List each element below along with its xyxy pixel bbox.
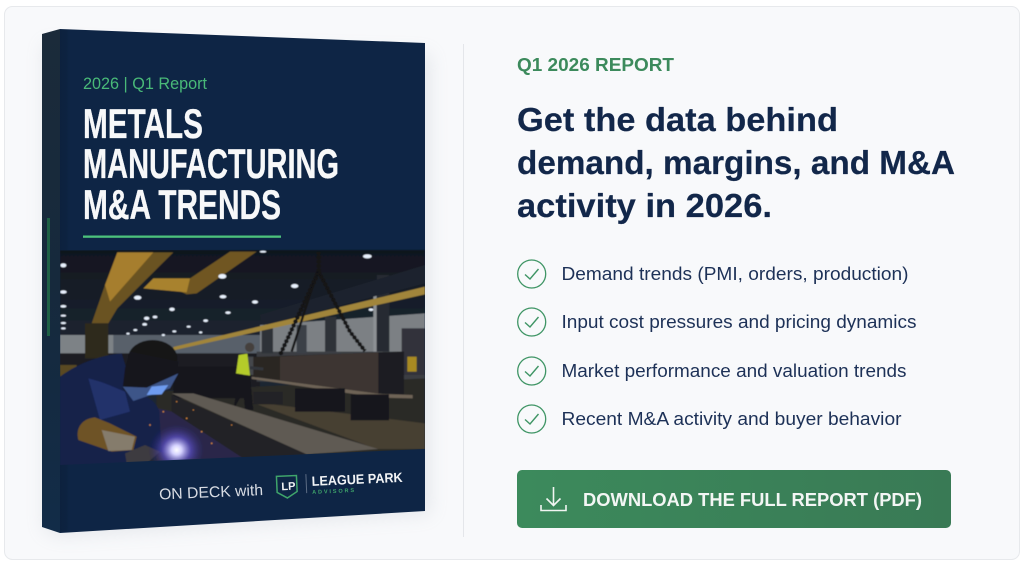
cover title: METALS [83,100,203,147]
I-beam [252,355,314,380]
cover photo: factory [60,250,425,477]
book front cover [60,29,425,533]
logo: League Park shield [276,476,297,498]
eyebrow: Q1 2026 REPORT [517,55,674,75]
cover fold [60,30,71,532]
floor [157,378,425,465]
hanging lights [60,251,373,336]
welder [60,353,162,466]
cover title: M&A TRENDS [83,181,281,228]
yellow rail [173,287,425,350]
main heading [517,101,955,224]
cover title [83,100,339,228]
main heading: Get the data behind [517,101,838,138]
checklist [518,260,916,433]
book cover mockup [42,29,430,536]
item: demand trends: Demand trends (PMI, orders, production) [562,264,908,284]
item: market performance: Market performance and valuation trends [562,361,906,381]
far wall [60,335,117,355]
cover title: MANUFACTURING [83,140,339,187]
item: input costs: Input cost pressures and pricing dynamics [562,312,916,332]
logo subline: ADVISORS [312,488,355,496]
report period: 2026 | Q1 Report [83,75,207,93]
logo wordmark: LEAGUE PARK [311,470,403,489]
crane [92,252,173,323]
main heading: demand, margins, and M&A [517,144,955,181]
on deck label: ON DECK with [159,482,263,504]
publisher line [159,470,404,504]
spine green text [47,218,50,336]
download button [517,470,951,528]
panel divider [463,44,464,537]
item: demand trends [518,260,908,288]
icon: download [541,487,566,510]
chains [280,252,365,355]
book spine [42,29,60,533]
item: input costs [518,308,916,336]
floor beam [172,393,378,454]
logo: League Park shield: LP [281,481,296,493]
item: recent M&A: Recent M&A activity and buyer behavior [562,409,902,429]
main heading: activity in 2026. [517,187,772,224]
worker in hi-vis vest [234,386,253,410]
button label: DOWNLOAD THE FULL REPORT (PDF) [583,490,922,510]
item: market performance [518,357,906,385]
logo divider [305,474,307,493]
welding sparks [150,426,202,461]
book shadow [44,44,430,536]
ceiling trusses [330,266,425,298]
green rule [83,236,281,238]
item: recent M&A [518,405,902,433]
